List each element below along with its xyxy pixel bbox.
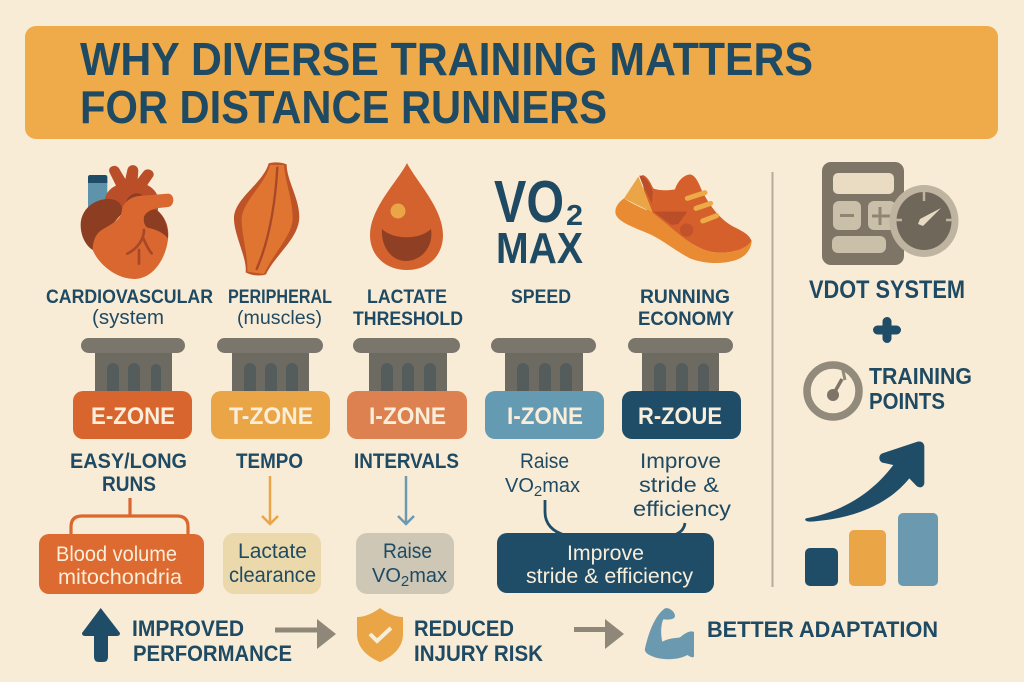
label: better adaptation: BETTER ADAPTATION (707, 617, 938, 642)
outcome box: raise vo2max: Raise (383, 540, 432, 563)
icon: vo2 max: MAX (496, 224, 583, 273)
outcome box: lactate clearance: Lactate (238, 540, 307, 563)
pillar: I: I-ZONE (369, 403, 446, 430)
sublabel: improve stride: efficiency (633, 498, 732, 521)
label: peripheral: PERIPHERAL (228, 287, 332, 308)
pillar: I second (485, 338, 604, 439)
icon: running shoe (615, 174, 752, 263)
pillar: E (73, 338, 192, 439)
connector curves to shared box (545, 500, 685, 536)
panel: vdot and training points (805, 162, 972, 586)
outcome box: improve stride and efficiency: stride & efficiency (526, 565, 694, 588)
pillar: R: R-ZOUE (638, 403, 722, 430)
label: running economy: ECONOMY (638, 309, 734, 330)
icon: drop (370, 163, 443, 270)
chart: rising bars with arrow (805, 441, 938, 586)
outcome box: blood volume: Blood volume (56, 543, 177, 566)
sublabel: easy long runs: RUNS (102, 473, 156, 496)
bracket connector (71, 498, 188, 534)
arrow: intervals down (398, 476, 414, 524)
outcome box: lactate clearance (223, 533, 321, 594)
icon: training gauge (807, 365, 859, 417)
sublabel: raise vo2max: VO (505, 475, 534, 497)
sublabel: improve stride: Improve (640, 450, 721, 473)
label: improved performance: PERFORMANCE (133, 641, 292, 666)
column: speed (485, 169, 604, 500)
label: cardiovascular: (system (92, 307, 164, 329)
pillar: T: T-ZONE (229, 403, 313, 430)
label: reduced injury risk: REDUCED (414, 616, 514, 641)
sublabel: raise vo2max: Raise (520, 450, 569, 473)
label: running economy: RUNNING (640, 287, 730, 308)
arrow: tempo down (262, 476, 278, 524)
label: lactate threshold (353, 287, 463, 330)
label: lactate threshold: LACTATE (367, 287, 447, 308)
label: cardiovascular: CARDIOVASCULAR (46, 287, 213, 308)
label: training points: TRAINING (869, 363, 972, 389)
icon: vo2 max (494, 169, 583, 273)
icon: muscle (234, 162, 299, 275)
label: cardiovascular (46, 287, 213, 329)
sublabel: raise vo2max: 2 (534, 483, 542, 500)
icon: flexed arm (645, 608, 694, 659)
pillar: I second: I-ZONE (507, 403, 583, 430)
outcome box: raise vo2max (356, 533, 454, 594)
icon: heart (81, 165, 173, 279)
sublabel: raise vo2max (505, 450, 580, 500)
icon: plus (878, 322, 896, 338)
sublabel: intervals: INTERVALS (354, 450, 459, 473)
arrow: second grey (574, 619, 624, 649)
column: running economy (615, 174, 752, 521)
outcome box: lactate clearance: clearance (229, 564, 316, 587)
outcome box: improve stride and efficiency: Improve (567, 542, 644, 565)
label: speed: SPEED (511, 287, 571, 308)
footer: outcomes (82, 608, 938, 666)
title banner (25, 26, 998, 139)
outcome box: improve stride and efficiency (497, 533, 714, 593)
sublabel: improve stride (633, 450, 732, 521)
outcome box: raise vo2max: 2 (401, 573, 409, 590)
title banner: WHY DIVERSE TRAINING MATTERS (80, 33, 813, 85)
outcome box: raise vo2max: VO (372, 565, 401, 587)
icon: calculator with gauge (822, 162, 958, 265)
outcome box: raise vo2max: max (409, 565, 447, 587)
label: reduced injury risk: INJURY RISK (414, 641, 544, 666)
sublabel: easy long runs: EASY/LONG (70, 450, 187, 473)
label: peripheral (228, 287, 332, 329)
icon: vo2 max: 2 (566, 200, 583, 232)
sublabel: improve stride: stride & (639, 474, 719, 497)
label: peripheral: (muscles) (237, 308, 322, 329)
sublabel: easy long runs (70, 450, 187, 496)
pillar: R (622, 338, 741, 439)
arrow: first grey (275, 619, 336, 649)
label: training points: POINTS (869, 388, 945, 414)
pillar: T (211, 338, 330, 439)
label: improved performance (132, 616, 292, 666)
sublabel: raise vo2max: max (542, 475, 580, 497)
label: running economy (638, 287, 734, 330)
label: reduced injury risk (414, 616, 544, 666)
title banner: FOR DISTANCE RUNNERS (80, 81, 607, 133)
outcome box: blood volume: mitochondria (58, 566, 182, 589)
label: improved performance: IMPROVED (132, 616, 244, 641)
sublabel: tempo: TEMPO (236, 450, 303, 473)
column: lactate threshold (347, 163, 467, 594)
column: cardiovascular (39, 165, 213, 594)
label: vdot system: VDOT SYSTEM (809, 276, 965, 304)
pillar: E: E-ZONE (91, 403, 175, 430)
icon: shield (357, 608, 403, 662)
divider (772, 172, 774, 587)
icon: vo2 max: VO (494, 169, 564, 235)
icon: up arrow (82, 608, 120, 662)
pillar: I (347, 338, 467, 439)
label: training points (869, 363, 972, 414)
column: peripheral (211, 162, 332, 594)
label: lactate threshold: THRESHOLD (353, 309, 463, 330)
outcome box: blood volume (39, 534, 204, 594)
